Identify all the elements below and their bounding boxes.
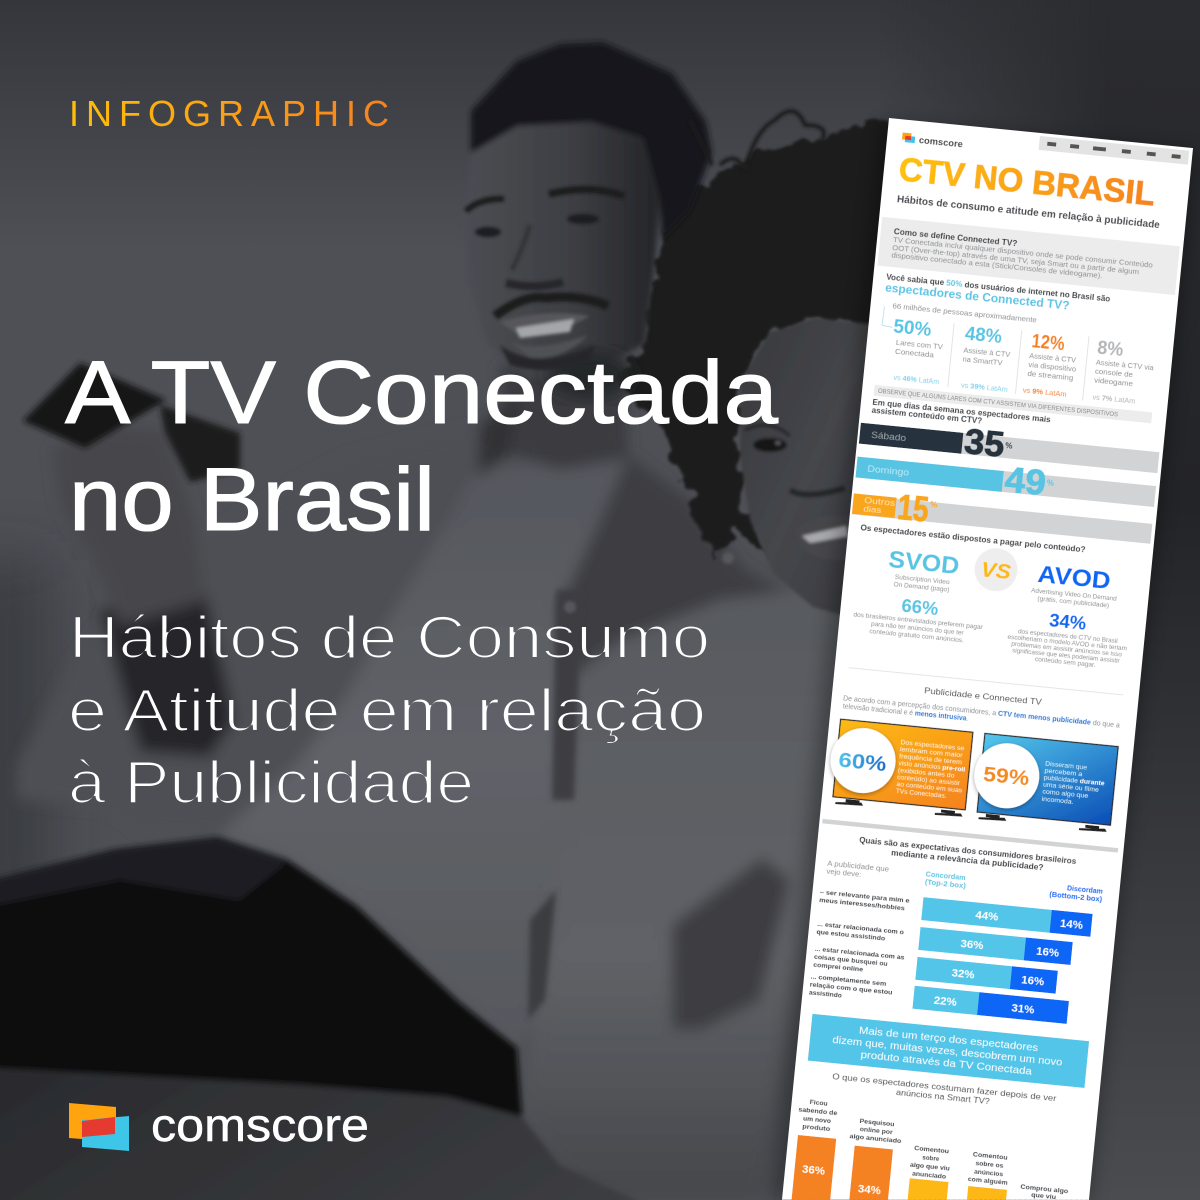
AVOD column: Advertising Video On Demand xyxy=(1031,587,1117,603)
woman's face xyxy=(740,318,880,620)
column: commented on an ad: sobre xyxy=(922,1154,940,1163)
sweater xyxy=(522,590,860,1200)
heading: A TV Conectada no Brasil: no Brasil xyxy=(69,449,435,549)
stat: 12% streaming: de streaming xyxy=(1027,369,1074,382)
eyes xyxy=(475,227,501,237)
column: bought something xyxy=(1019,1184,1068,1200)
column: talked to someone about ads: sobre os xyxy=(975,1160,1004,1170)
sweater shadow xyxy=(672,858,790,1030)
AVOD column: AVOD xyxy=(1036,561,1112,595)
stacked bar row 1: 44% xyxy=(975,909,999,924)
TV card: 60%: ao conteúdo em suas xyxy=(896,781,962,794)
man's hair xyxy=(471,42,712,240)
man's hand and forearm xyxy=(52,425,205,625)
column: talked to someone about ads: com alguém xyxy=(968,1176,1008,1187)
column: talked to someone about ads: anúncios xyxy=(974,1169,1004,1178)
moustache and mouth xyxy=(495,297,608,316)
stat: 8% console: Assiste à CTV via xyxy=(1096,358,1155,372)
stat: 50% households: 50% xyxy=(892,317,932,341)
label: INFOGRAPHIC: INFOGRAPHIC xyxy=(69,93,389,134)
tilted infographic document xyxy=(782,118,1193,1200)
column: bought something: Comprou algo xyxy=(1020,1184,1068,1195)
column: 34% searched online xyxy=(843,1117,903,1200)
TV card: 59%: Disseram que xyxy=(1045,761,1088,772)
shadow under arm xyxy=(100,590,235,757)
column: 36% learned of a new product: um novo xyxy=(803,1115,831,1125)
stacked bar row 4: 31% xyxy=(1011,1002,1035,1017)
subheading: Hábitos de Consumo e Atitude em relação à Publicidade: Hábitos de Consumo xyxy=(69,604,710,671)
TV card: 60%: TVs Conectadas. xyxy=(895,788,947,800)
column: 36% learned of a new product xyxy=(789,1098,840,1200)
document logo xyxy=(901,132,963,150)
TV card: 60%: (exibidos antes do xyxy=(897,767,955,780)
stacked bar row 1: – ser relevante para mim e xyxy=(820,889,910,905)
AVOD column: (grátis, com publicidade) xyxy=(1037,595,1109,610)
neck xyxy=(500,350,628,470)
column: commented on an ad: algo que viu xyxy=(910,1162,950,1173)
column: 36% learned of a new product: produto xyxy=(802,1123,830,1133)
stat: 48% SmartTV xyxy=(960,324,1014,394)
callout: new product discovery xyxy=(808,1014,1089,1088)
stacked bar row 2: ... estar relacionada com o xyxy=(817,921,904,936)
column: commented on an ad: anunciado xyxy=(912,1170,946,1181)
column: commented on an ad: Comentou xyxy=(914,1145,949,1155)
column: 34% searched online: online por xyxy=(859,1126,893,1136)
legend: agree: Concordam xyxy=(925,871,966,882)
hair curls xyxy=(690,111,824,170)
man's face xyxy=(465,122,660,379)
AVOD column: dos espectadores de CTV no Brasil xyxy=(1018,628,1118,645)
section heading: days: Em que dias da semana os espectadores mais xyxy=(872,398,1052,424)
panel: definition: Como se define Connected TV? xyxy=(893,226,1018,248)
TV card: 60%: frequência de terem xyxy=(899,753,962,766)
section heading: viewers: Você sabia que 50% dos usuários de internet no Brasil são xyxy=(886,273,1111,304)
column: 36% learned of a new product: sabendo de xyxy=(798,1106,838,1117)
SVOD column: SVOD xyxy=(887,546,961,580)
bar: Sábado 35%: 35 xyxy=(963,422,1006,465)
bar: Domingo 49% xyxy=(855,446,1157,514)
stacked bar row 3: 32% xyxy=(951,967,975,982)
stat: 50% households: Conectada xyxy=(895,347,935,360)
stacked bar row 4 xyxy=(808,973,1069,1024)
stacked bar row 3 xyxy=(813,946,1058,994)
column: commented on an ad xyxy=(907,1145,952,1200)
TV card: 60%: conteúdo) ao assistir xyxy=(897,774,960,787)
bar: Outros dias 15%: dias xyxy=(863,503,882,515)
stat: 12% streaming: via dispositivo xyxy=(1028,360,1077,374)
stacked bar row 1: 14% xyxy=(1059,918,1084,932)
section heading: viewers xyxy=(883,273,1111,332)
AVOD column xyxy=(1005,559,1135,672)
chart lead text xyxy=(826,859,889,882)
subheading: Hábitos de Consumo e Atitude em relação à Publicidade xyxy=(68,604,710,816)
stacked bar row 4: 22% xyxy=(933,995,958,1009)
stacked bar row 3: ... estar relacionada com as xyxy=(814,946,905,962)
legend: agree: (Top-2 box) xyxy=(925,879,966,890)
pocket button xyxy=(722,552,734,564)
legend: agree xyxy=(925,871,967,890)
column: talked to someone about ads xyxy=(966,1151,1011,1200)
stacked bar row 3: comprei online xyxy=(813,962,864,974)
TV card: 60% xyxy=(826,719,973,818)
SVOD column: Subscription Video xyxy=(894,574,950,586)
panel: definition: TV Conectada inclui qualquer dispositivo onde se pode consumir Conteúdo xyxy=(893,235,1153,270)
bar: Outros dias 15%: 15 xyxy=(896,488,930,530)
legend: disagree xyxy=(1049,884,1103,904)
section heading: relevance: Quais são as expectativas dos consumidores brasileiros xyxy=(859,836,1077,866)
panel: definition: dispositivo conectado a esta (Stick/Consoles de videogame). xyxy=(891,250,1103,280)
bar: Outros dias 15%: % xyxy=(930,500,938,510)
column: 34% searched online: Pesquisou xyxy=(859,1118,895,1128)
couch xyxy=(0,1067,700,1200)
subheading: Hábitos de Consumo e Atitude em relação à Publicidade: e Atitude em relação xyxy=(68,677,706,744)
subheading: Hábitos de Consumo e Atitude em relação à Publicidade: à Publicidade xyxy=(68,749,474,816)
sheet shadow xyxy=(770,122,1197,1200)
stat: 8% console: videogame xyxy=(1094,375,1133,388)
stat: 8% console xyxy=(1092,338,1157,407)
legend: disagree: (Bottom-2 box) xyxy=(1049,892,1102,904)
stacked bar row 2: 16% xyxy=(1036,946,1060,960)
legend: disagree: Discordam xyxy=(1067,885,1103,896)
stat: 48% SmartTV: 48% xyxy=(964,324,1003,348)
section heading: days: assistem conteúdo em CTV? xyxy=(871,406,983,426)
jeans xyxy=(0,837,522,1117)
document subtitle: Hábitos de consumo e atitude em relação à publicidade xyxy=(896,193,1161,231)
bar: Domingo 49%: % xyxy=(1046,478,1054,488)
TV card: 59%: como algo que xyxy=(1042,788,1089,800)
advertising intro text: televisão tradicional e é menos intrusiva. xyxy=(842,703,969,723)
stacked bar row 3: coisas que busquei ou xyxy=(814,954,888,968)
TV card: 59%: percebem a xyxy=(1044,767,1083,778)
stacked bar row 2: 36% xyxy=(960,938,984,952)
panel: definition xyxy=(877,217,1180,295)
stat: 8% console: 8% xyxy=(1096,338,1124,361)
stat: 50% households xyxy=(888,317,945,386)
comscore logo xyxy=(69,1099,369,1151)
stat: 8% console: vs 7% LatAm xyxy=(1092,394,1136,406)
stacked bar row 1: meus interesses/hobbies xyxy=(819,897,905,912)
bar: Outros dias 15% xyxy=(851,483,1153,552)
network logos strip xyxy=(1039,136,1189,165)
section heading: relevance: mediante a relevância da publicidade? xyxy=(891,848,1044,872)
note strip: OBSERVE QUE ALGUNS LARES COM CTV ASSISTEM VIA DIFERENTES DISPOSITIVOS xyxy=(878,388,1119,419)
chart lead text: vejo deve: xyxy=(826,867,862,879)
heading: A TV Conectada no Brasil xyxy=(65,342,779,549)
stat: 12% streaming xyxy=(1022,331,1079,400)
stat: 50% households: Lares com TV xyxy=(896,338,943,351)
stacked bar row 1 xyxy=(818,887,1093,937)
remote xyxy=(23,363,166,448)
stacked bar row 3: 16% xyxy=(1021,974,1045,988)
denim strip xyxy=(552,590,582,800)
TV card: 59% xyxy=(970,733,1118,833)
SVOD column: 66% xyxy=(901,596,939,619)
stacked bar row 2: que estou assistindo xyxy=(816,929,885,943)
bar: Sábado 35%: % xyxy=(1005,441,1013,451)
heading: A TV Conectada no Brasil: A TV Conectada xyxy=(65,342,779,442)
section heading: advertising: Publicidade e Connected TV xyxy=(924,685,1043,707)
document logo: comscore xyxy=(918,135,963,150)
VS badge xyxy=(973,546,1020,593)
stat: 50% households: vs 46% LatAm xyxy=(893,375,940,386)
TV card: 60%: 60% xyxy=(837,749,888,776)
section heading: pay: Os espectadores estão dispostos a pagar pelo conteúdo? xyxy=(860,523,1086,554)
AVOD column: conteúdo sem pagar. xyxy=(1035,656,1096,669)
callout: new product discovery: produto através da TV Conectada xyxy=(860,1050,1033,1078)
TV card: 60%: visto anúncios pre-roll xyxy=(898,760,966,774)
bar: Outros dias 15%: Outros xyxy=(864,495,896,508)
SVOD column: dos brasileiros entrevistados preferem pagar xyxy=(853,611,983,631)
stacked bar row 4: ... completamente sem xyxy=(810,973,887,988)
section heading: viewers: 66 milhões de pessoas aproximadamente xyxy=(892,301,1037,325)
man's shirt xyxy=(17,428,480,837)
SVOD column: para não ter anúncios do que ter xyxy=(871,621,964,637)
section heading: actions: O que os espectadores costumam fazer depois de ver xyxy=(832,1072,1057,1103)
stat: 8% console: console de xyxy=(1095,367,1133,379)
stacked bar row 2 xyxy=(816,917,1073,965)
eyebrows xyxy=(466,199,504,211)
stat: 48% SmartTV: vs 39% LatAm xyxy=(961,382,1008,394)
AVOD column: problemas em assistir anúncios se isso xyxy=(1011,641,1123,659)
AVOD column: significasse que eles poderiam assistir xyxy=(1012,647,1120,665)
bar: Domingo 49%: Domingo xyxy=(867,464,910,479)
stat: 12% streaming: vs 9% LatAm xyxy=(1022,388,1067,399)
column: 34% searched online: 34% xyxy=(857,1183,882,1197)
comscore logo: comscore xyxy=(151,1099,369,1151)
TV card: 59%: 59% xyxy=(982,763,1031,790)
section heading: actions xyxy=(831,1072,1057,1113)
TV card: 59%: incomoda. xyxy=(1041,796,1074,806)
SVOD column: conteúdo gratuito com anúncios. xyxy=(869,628,965,644)
AVOD column: 34% xyxy=(1048,610,1087,634)
nose xyxy=(506,282,563,286)
bar: Domingo 49%: 49 xyxy=(1003,460,1048,503)
callout: new product discovery: dizem que, muitas vezes, descobrem um novo xyxy=(832,1035,1063,1069)
VS badge: VS xyxy=(980,558,1012,584)
section heading: actions: anúncios na Smart TV? xyxy=(896,1088,991,1106)
TV card: 60%: Dos espectadores se xyxy=(900,739,965,753)
bar: Sábado 35%: Sábado xyxy=(871,430,907,444)
stat: 12% streaming: 12% xyxy=(1031,331,1066,355)
document title: CTV NO BRASIL xyxy=(897,150,1157,212)
advertising intro text: De acordo com a percepção dos consumidores, a CTV tem menos publicidade do que a xyxy=(843,695,1120,730)
stat: 48% SmartTV: Assiste à CTV xyxy=(963,345,1011,359)
SVOD column xyxy=(852,543,990,646)
TV card: 59%: uma série ou filme xyxy=(1043,781,1100,794)
stacked bar row 4: assistindo xyxy=(809,989,842,1000)
TV card: 60%: lembram com maior xyxy=(900,746,963,759)
column: talked to someone about ads: Comentou xyxy=(972,1151,1008,1162)
stacked bar row 4: relação com o que estou xyxy=(809,981,893,997)
panel: definition: OOT (Over-the-top) através de uma TV, seja Smart ou a partir de algum xyxy=(892,243,1140,276)
column: 36% learned of a new product: 36% xyxy=(801,1164,826,1178)
callout: new product discovery: Mais de um terço dos espectadores xyxy=(858,1026,1039,1054)
bracket arrow to 50% xyxy=(882,306,894,327)
column: 34% searched online: algo anunciado xyxy=(849,1133,902,1145)
TV card: 59%: publicidade durante xyxy=(1043,774,1105,787)
stat: 12% streaming: Assiste à CTV xyxy=(1029,351,1077,365)
column: 36% learned of a new product: Ficou xyxy=(809,1099,828,1108)
bar: Sábado 35% xyxy=(858,412,1160,480)
t-shirt xyxy=(218,455,660,1048)
hair of woman xyxy=(620,118,905,560)
woman's denim jacket xyxy=(558,455,800,676)
section heading: viewers: espectadores de Connected TV? xyxy=(885,282,1070,313)
SVOD column: On Demand (pago) xyxy=(893,581,950,594)
chart lead text: A publicidade que xyxy=(827,859,889,874)
stat: 48% SmartTV: na SmartTV xyxy=(962,354,1003,367)
AVOD column: escolheriam o modelo AVOD e não teriam xyxy=(1007,634,1127,652)
